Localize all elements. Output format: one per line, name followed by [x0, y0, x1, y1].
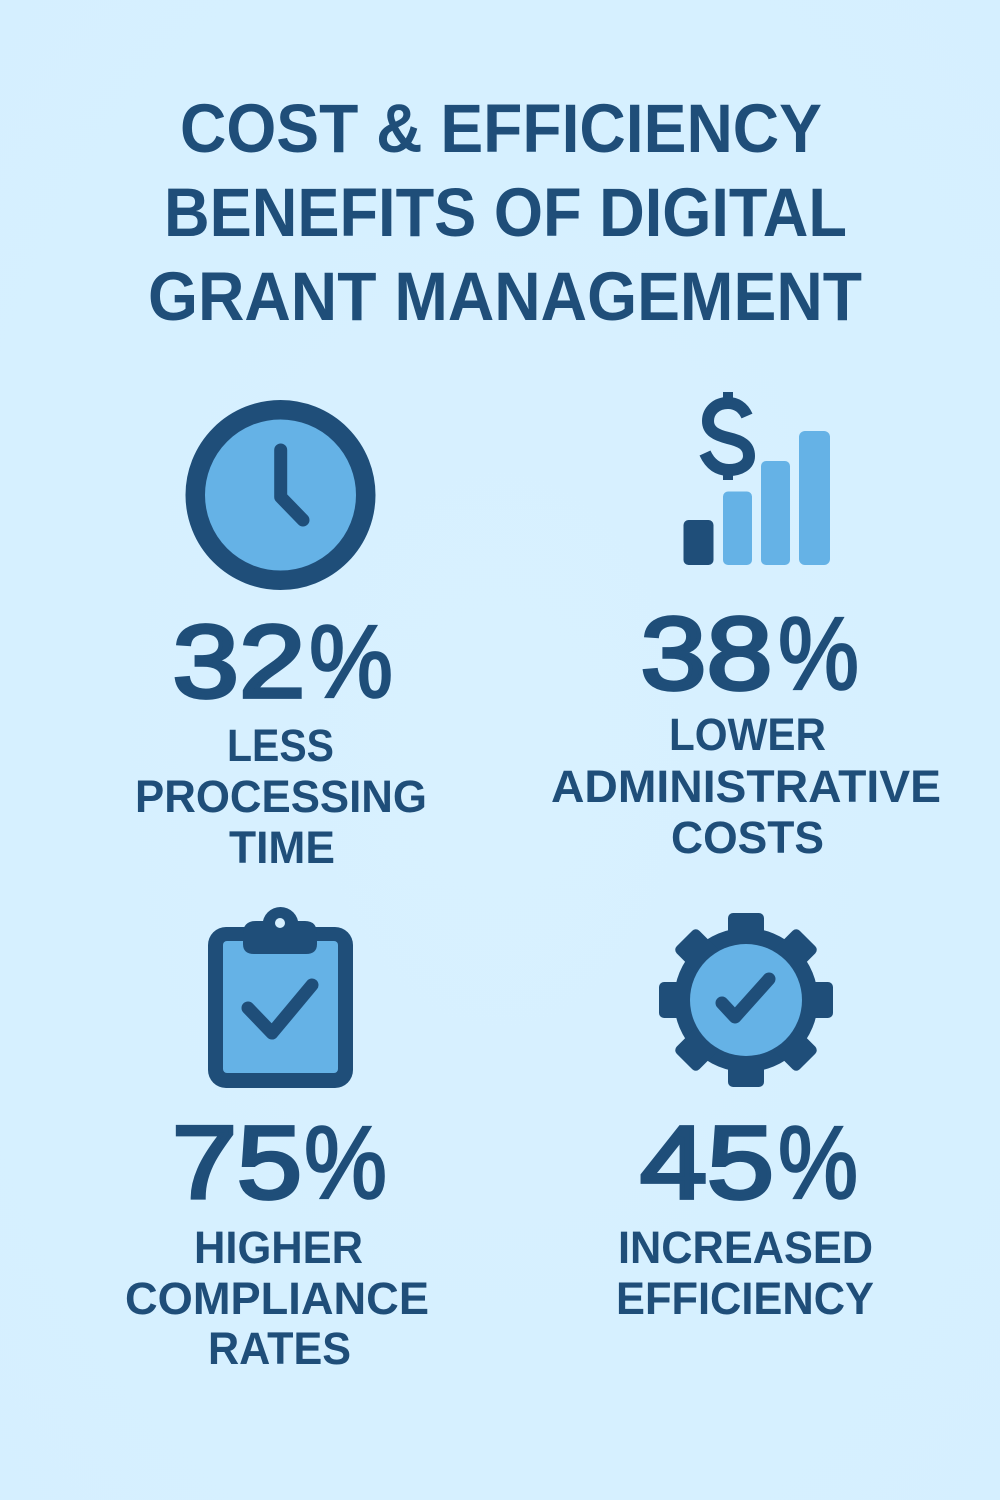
- label: lower administrative costs: COSTS: [671, 812, 824, 863]
- stat: 38%: [640, 596, 859, 711]
- stat: 32%: %: [309, 604, 393, 719]
- stat: 32%: 32: [172, 604, 306, 719]
- label: increased efficiency: EFFICIENCY: [616, 1273, 874, 1324]
- stat: 38%: %: [778, 596, 859, 711]
- title: [148, 90, 862, 335]
- panel: less processing time: [135, 410, 427, 873]
- label: less processing time: LESS: [227, 720, 334, 771]
- label: lower administrative costs: LOWER: [669, 709, 826, 760]
- label: less processing time: PROCESSING: [135, 771, 427, 822]
- stat: 45%: %: [778, 1105, 858, 1220]
- icon: gear with check: [659, 913, 833, 1087]
- stat: 45%: 45: [640, 1105, 774, 1220]
- icon: dollar and rising bars: [684, 392, 830, 565]
- title: COST & EFFICIENCY: [180, 90, 822, 167]
- stat: 75%: [172, 1105, 387, 1220]
- stat: 32%: [172, 604, 393, 719]
- label: increased efficiency: [616, 1222, 874, 1324]
- stat: 75%: 75: [172, 1105, 302, 1220]
- label: higher compliance rates: COMPLIANCE: [125, 1273, 429, 1324]
- label: higher compliance rates: RATES: [208, 1323, 351, 1374]
- stat: 75%: %: [304, 1105, 387, 1220]
- icon: clipboard with check: [208, 907, 353, 1088]
- panel: increased efficiency: [616, 913, 874, 1324]
- label: lower administrative costs: ADMINISTRATIVE: [551, 761, 941, 812]
- label: less processing time: TIME: [229, 822, 335, 873]
- label: higher compliance rates: [125, 1222, 429, 1374]
- panel: lower administrative costs: [551, 392, 941, 863]
- stat: 45%: [640, 1105, 858, 1220]
- panel: higher compliance rates: [125, 907, 429, 1374]
- label: lower administrative costs: [551, 709, 941, 863]
- icon: clock: [195, 410, 366, 580]
- label: higher compliance rates: HIGHER: [194, 1222, 363, 1273]
- label: less processing time: [135, 720, 427, 873]
- stat: 38%: 38: [640, 596, 772, 711]
- title: BENEFITS OF DIGITAL: [164, 174, 847, 251]
- label: increased efficiency: INCREASED: [618, 1222, 873, 1273]
- title: GRANT MANAGEMENT: [148, 258, 862, 335]
